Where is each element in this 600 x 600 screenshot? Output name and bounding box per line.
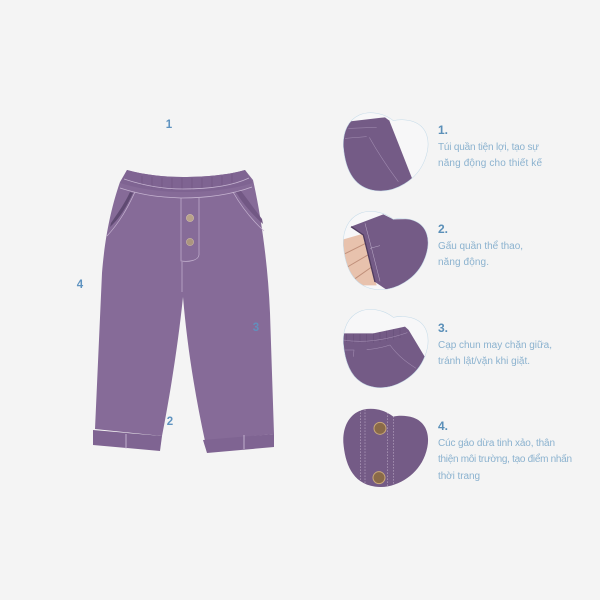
right pocket	[236, 191, 263, 224]
feature 2 text: 2.	[438, 222, 448, 236]
marker 1: 1	[166, 119, 173, 131]
detail heart 1: pocket	[343, 112, 428, 192]
pants body	[95, 170, 274, 441]
left cuff	[93, 430, 162, 451]
cuff fabric	[351, 214, 430, 292]
button stitching	[361, 409, 393, 489]
waistband fabric	[343, 326, 424, 388]
bottom button	[373, 472, 385, 484]
button top	[186, 214, 194, 222]
feature 4 text: thiện môi trường, tạo điểm nhấn	[438, 453, 572, 465]
feature 4 text: thời trang	[438, 471, 480, 482]
button bottom	[186, 238, 194, 246]
feature 1 text: Túi quần tiện lợi, tạo sự	[438, 141, 539, 153]
seam stitching	[107, 178, 264, 292]
marker 2: 2	[167, 416, 173, 428]
marker 3: 3	[253, 322, 259, 334]
feature 4 text	[438, 419, 572, 482]
feature 1 text	[438, 123, 542, 169]
cuff opening shadow	[351, 227, 375, 282]
feature 3 text: Cạp chun may chặn giữa,	[438, 340, 552, 351]
detail heart 2: cuff	[343, 211, 428, 290]
left cuff stitch	[125, 434, 127, 449]
feature 2 text: Gấu quần thể thao,	[438, 240, 523, 252]
right cuff	[203, 434, 274, 453]
waistband	[120, 170, 253, 192]
waistband stitching	[343, 333, 416, 368]
hand	[340, 234, 377, 285]
feature 3 text: 3.	[438, 321, 448, 335]
finger gaps	[345, 244, 372, 279]
feature 1 text: năng động cho thiết kế	[438, 157, 542, 169]
waistband gathers	[142, 174, 232, 190]
feature 2 text: năng động.	[438, 257, 489, 268]
pocket fabric	[343, 117, 412, 191]
top button	[374, 422, 386, 434]
detail heart 4: buttons	[343, 408, 428, 487]
right cuff stitch	[243, 435, 245, 449]
left pocket	[110, 192, 133, 227]
feature 4 text: Cúc gáo dừa tinh xảo, thân	[438, 438, 555, 449]
cuff stitching	[365, 223, 380, 281]
feature 2 text	[438, 222, 523, 268]
marker 4: 4	[77, 279, 84, 291]
feature 3 text: tránh lật/vặn khi giặt.	[438, 356, 530, 367]
detail heart 3: waistband	[343, 309, 428, 388]
feature 1 text: 1.	[438, 123, 448, 137]
feature 3 text	[438, 321, 552, 367]
pocket stitching	[345, 127, 398, 182]
pants illustration	[93, 170, 274, 453]
feature 4 text: 4.	[438, 419, 448, 433]
waistband gathers	[347, 328, 400, 343]
